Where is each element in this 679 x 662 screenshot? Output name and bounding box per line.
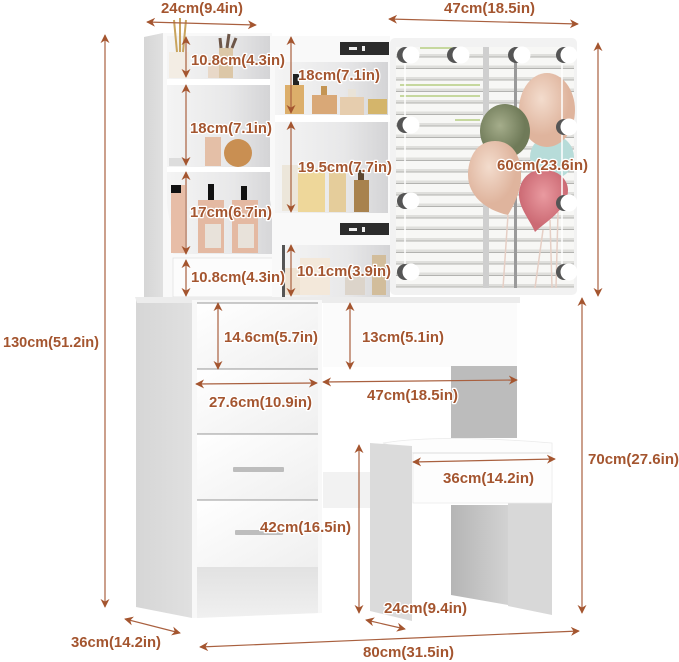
left cabinet decor <box>169 18 258 253</box>
left cabinet drawer <box>173 258 277 297</box>
dimension labels: 10.8cm(4.3in) <box>191 270 285 286</box>
mirror <box>390 38 578 295</box>
drawer column <box>192 300 322 618</box>
dimension labels: 18cm(7.1in) <box>190 121 272 137</box>
vanity desk <box>135 297 520 618</box>
dimension labels: 70cm(27.6in) <box>588 452 679 468</box>
dimension labels: 27.6cm(10.9in) <box>209 395 312 411</box>
lower hinge <box>340 223 389 235</box>
left cabinet <box>144 33 277 297</box>
dimension labels: 24cm(9.4in) <box>384 601 467 617</box>
dimension labels: 47cm(18.5in) <box>444 1 535 17</box>
stool <box>370 438 552 621</box>
drawer handle <box>233 467 284 472</box>
mirror reflection: blinds <box>396 47 574 288</box>
upper hutch <box>144 18 390 297</box>
top right drawer <box>323 303 517 367</box>
dimension labels: 130cm(51.2in) <box>3 335 99 351</box>
dimension labels: 13cm(5.1in) <box>362 330 444 346</box>
back bar <box>323 472 370 508</box>
stool seat <box>383 438 552 503</box>
dimension labels: 19.5cm(7.7in) <box>298 160 392 176</box>
dimension labels: 17cm(6.7in) <box>190 205 272 221</box>
dimension labels: 80cm(31.5in) <box>363 645 454 661</box>
desk right leg <box>451 366 517 438</box>
dimension labels: 36cm(14.2in) <box>71 635 161 651</box>
dimension labels: 24cm(9.4in) <box>161 1 243 17</box>
dimension arrows <box>105 19 598 647</box>
hinge <box>340 42 389 55</box>
middle cabinet decor <box>282 74 387 295</box>
dimension labels: 14.6cm(5.7in) <box>224 330 318 346</box>
stool back legs <box>451 505 508 605</box>
dimension labels: 47cm(18.5in) <box>367 388 458 404</box>
dimension labels: 18cm(7.1in) <box>298 68 380 84</box>
dimension labels: 42cm(16.5in) <box>260 520 351 536</box>
middle cabinet <box>272 36 390 297</box>
dimension labels: 36cm(14.2in) <box>443 471 534 487</box>
stool front leg <box>370 443 412 621</box>
desk side panel <box>136 300 192 618</box>
balloons <box>468 73 575 288</box>
vanity light bulbs <box>397 46 578 280</box>
lower drawer handle <box>235 530 283 535</box>
dimension labels: 10.8cm(4.3in) <box>191 53 285 69</box>
desk top <box>135 297 520 303</box>
dimension labels: 60cm(23.6in) <box>497 158 588 174</box>
dimension labels: 10.1cm(3.9in) <box>297 264 391 280</box>
